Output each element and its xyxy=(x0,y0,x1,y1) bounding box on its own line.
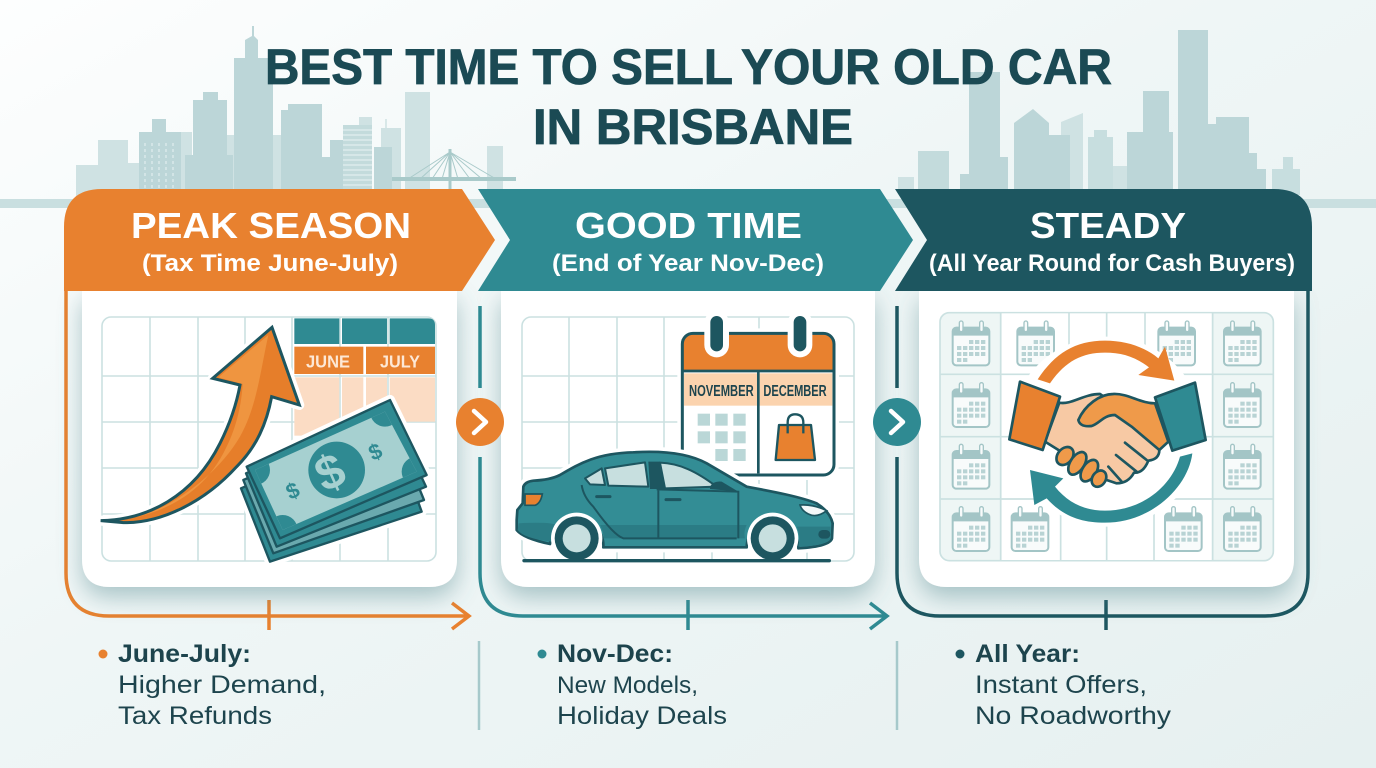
panel: peak season xyxy=(64,189,495,730)
caption: all year: No Roadworthy xyxy=(975,702,1172,730)
white card xyxy=(82,291,457,587)
header: good time xyxy=(478,189,913,291)
icon: calendar november december: NOVEMBER xyxy=(689,383,754,400)
arrow button: peak to good xyxy=(456,398,504,446)
skyline: left with bridge xyxy=(76,26,516,200)
calendar grid xyxy=(102,317,436,561)
header: peak season: (Tax Time June-July) xyxy=(142,250,398,277)
skyline: right xyxy=(898,30,1300,195)
title xyxy=(265,39,1112,155)
icon: car xyxy=(517,452,833,564)
caption: june-july: June-July: xyxy=(118,640,251,668)
icon: cash stack: $ xyxy=(307,443,354,503)
header: steady: (All Year Round for Cash Buyers) xyxy=(929,250,1295,277)
caption: nov-dec: New Models, xyxy=(557,672,698,699)
hands xyxy=(1009,382,1206,490)
calendar grid xyxy=(522,317,854,561)
title: BEST TIME TO SELL xyxy=(265,39,733,95)
header: steady: STEADY xyxy=(1030,205,1186,246)
icon: cash stack xyxy=(240,397,432,562)
cycle arrows xyxy=(1010,337,1203,527)
white card xyxy=(919,291,1294,587)
panel: good time xyxy=(478,189,913,730)
icon: cash stack: $ xyxy=(282,477,303,505)
horizon band xyxy=(0,199,1376,208)
icon: rising arrow xyxy=(101,327,299,523)
june july table: JUNE xyxy=(306,351,350,371)
header: good time: (End of Year Nov-Dec) xyxy=(552,250,824,277)
caption: all year: All Year: xyxy=(975,640,1080,668)
icon: calendar november december: DECEMBER xyxy=(763,383,827,400)
title: IN BRISBANE xyxy=(533,99,853,155)
june july table: JULY xyxy=(380,351,420,371)
caption: all year xyxy=(956,640,1172,730)
icon: handshake with cycle arrows xyxy=(1009,337,1206,527)
header: peak season: PEAK SEASON xyxy=(131,205,411,246)
caption: june-july: Tax Refunds xyxy=(118,702,272,730)
title: YOUR OLD CAR xyxy=(741,39,1112,95)
caption: all year: Instant Offers, xyxy=(975,671,1147,699)
icon: cash stack: $ xyxy=(365,438,386,466)
caption: nov-dec: Nov-Dec: xyxy=(557,640,673,668)
caption: nov-dec: Holiday Deals xyxy=(557,702,727,730)
header: good time: GOOD TIME xyxy=(575,205,802,246)
orange timeline frame xyxy=(66,270,469,630)
caption: nov-dec xyxy=(538,640,727,730)
caption: june-july xyxy=(98,640,326,730)
june july table xyxy=(294,318,435,436)
header: steady xyxy=(895,189,1312,291)
icon: calendar november december xyxy=(682,311,834,475)
white card xyxy=(501,291,875,587)
arrow button: good to steady xyxy=(873,398,921,446)
panel: steady xyxy=(895,189,1312,730)
teal timeline frame xyxy=(480,306,887,630)
header: peak season xyxy=(64,189,495,291)
dark timeline frame xyxy=(897,270,1308,630)
caption: june-july: Higher Demand, xyxy=(118,671,326,699)
calendar grid xyxy=(940,313,1273,561)
